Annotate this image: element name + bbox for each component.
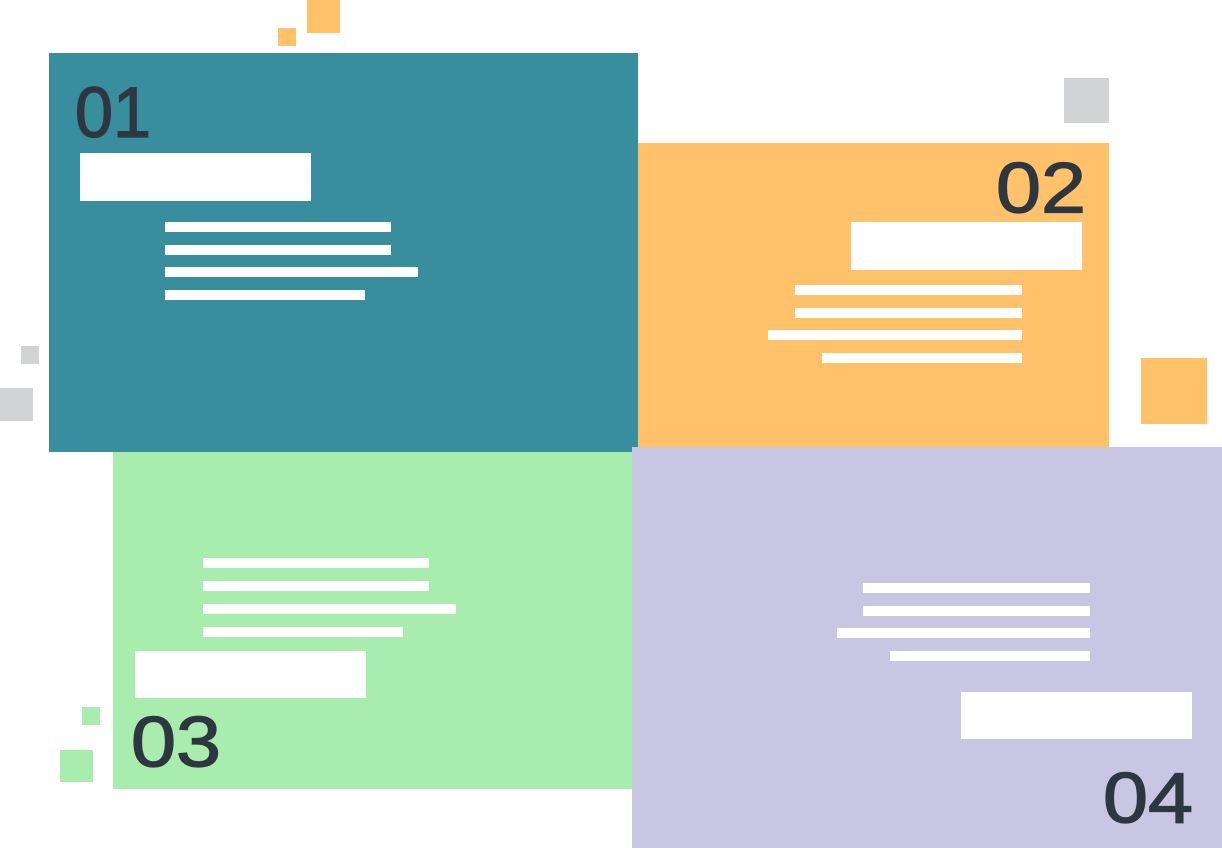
title placeholder 03 [135,651,366,698]
decorative square: gray top right [1064,78,1109,123]
text lines 01 [165,222,418,300]
panel: 02 orange [638,143,1109,448]
decorative square: orange right [1141,358,1207,424]
panel: 01 teal [49,53,638,452]
text lines 04 [837,583,1090,661]
decorative squares: green bottom left [60,707,100,782]
number 03: 03 [131,704,221,782]
number 01: 01 [75,74,151,153]
text lines 02 [768,285,1022,363]
title placeholder 02 [851,222,1082,270]
number 02: 02 [996,150,1086,228]
panel: 04 purple [632,447,1222,848]
number 04: 04 [1103,760,1193,838]
panel: 03 green [113,452,633,789]
decorative squares: gray left [0,346,39,421]
decorative squares: orange top [278,0,340,46]
text lines 03 [203,558,456,637]
title placeholder 01 [80,153,311,201]
title placeholder 04 [961,692,1192,739]
